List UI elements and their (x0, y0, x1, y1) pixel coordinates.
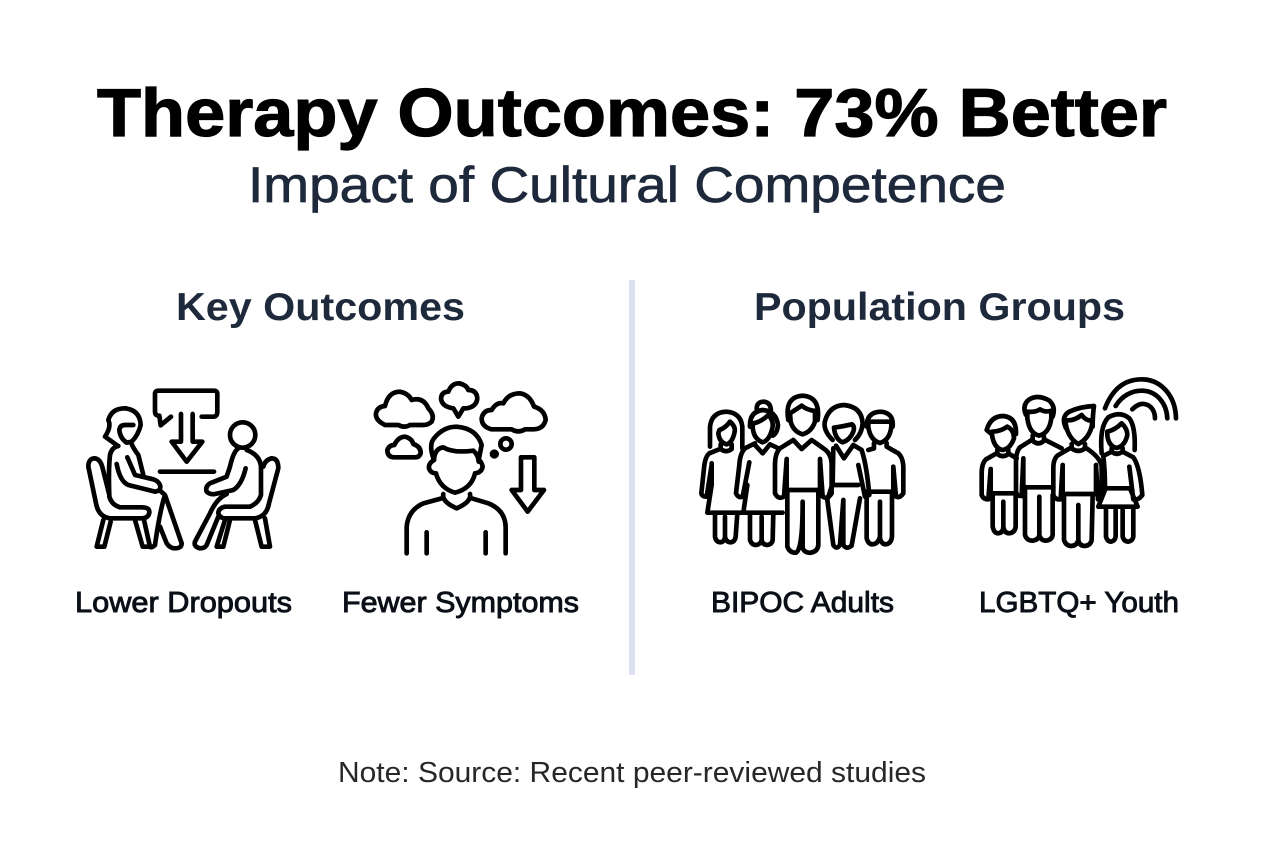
icon: group of four youth with rainbow (982, 379, 1176, 546)
label: fewer symptoms: Fewer Symptoms (342, 587, 579, 619)
icon: group of five adults (701, 396, 903, 553)
subtitle: Impact of Cultural Competence (248, 157, 1006, 213)
source note: Note: Source: Recent peer-reviewed studies (338, 757, 926, 789)
panel: key outcomes (75, 286, 579, 619)
label: lgbtq+ youth: LGBTQ+ Youth (979, 587, 1179, 619)
icon: person with clouds and down arrow (376, 383, 546, 553)
label: bipoc adults: BIPOC Adults (711, 587, 894, 619)
heading: population groups: Population Groups (754, 286, 1125, 329)
label: lower dropouts: Lower Dropouts (75, 587, 292, 619)
title: Therapy Outcomes: 73% Better (97, 75, 1167, 151)
icon: therapy session with down arrow (88, 391, 278, 548)
heading: key outcomes: Key Outcomes (176, 286, 465, 329)
divider (629, 280, 635, 675)
panel: population groups (701, 286, 1179, 619)
